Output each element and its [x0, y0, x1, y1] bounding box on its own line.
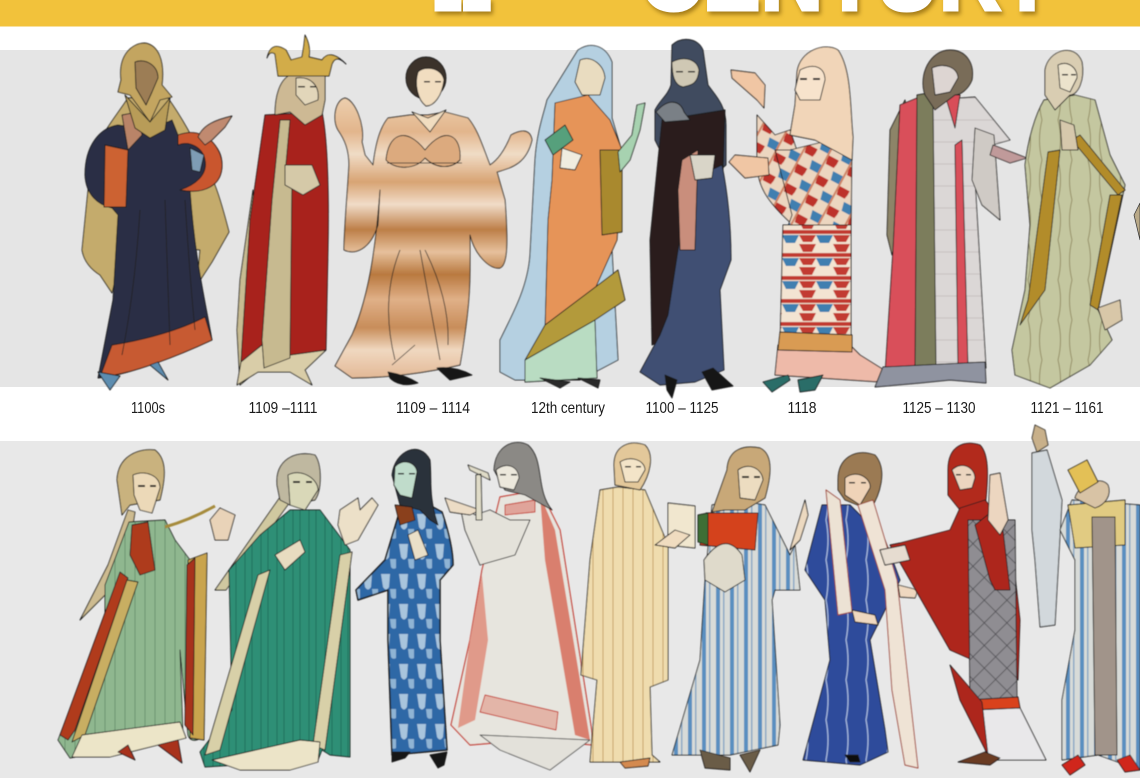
title banner [0, 0, 1140, 30]
date: 12th century: 12th century [531, 400, 605, 417]
figure: 1121–1161 [1012, 50, 1125, 388]
figure: king with raised arm [1032, 425, 1140, 775]
figure: white and red robe [445, 442, 594, 770]
panel: top row backdrop [0, 50, 1140, 387]
date: 1125–1130: 1125 – 1130 [902, 400, 976, 417]
figure: 12th century [500, 46, 645, 388]
date: 1118: 1118 [788, 400, 817, 417]
date: 1100–1125: 1100 – 1125 [646, 400, 719, 417]
date: 1109–1111: 1109 –1111 [248, 400, 318, 417]
figure: blue gown [356, 449, 453, 768]
figure: blue and tan robe with red book [672, 447, 808, 772]
date: 1100s: 1100s [131, 400, 165, 417]
date: 1121–1161: 1121 – 1161 [1030, 400, 1104, 417]
date: 1109–1114: 1109 – 1114 [396, 400, 470, 417]
figure: cream robe with book [581, 443, 695, 768]
figure: 1109–1114 [335, 57, 532, 385]
panel: bottom row backdrop [0, 441, 1140, 778]
figure: blue robe with long scarf [803, 453, 918, 768]
figure: green gown [58, 450, 235, 763]
figure: 1109–1111 [237, 35, 346, 385]
figure: red cope [880, 443, 1046, 765]
figure: 1100–1125 [640, 39, 733, 398]
figure: 1125–1130 [875, 50, 1027, 387]
figure: 1118 [729, 47, 884, 392]
figure fragment at edge [1134, 203, 1140, 240]
figure: teal gown [200, 454, 378, 770]
figure: 1100s [82, 43, 232, 390]
